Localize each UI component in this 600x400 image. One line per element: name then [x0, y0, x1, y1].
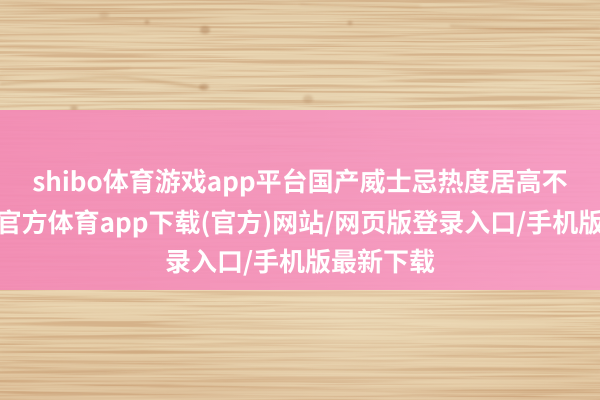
pink banner [0, 110, 600, 290]
title [0, 162, 600, 279]
title: 录入口/手机版最新下载 [165, 242, 435, 279]
title: shibo体育游戏app平台国产威士忌热度居高不 [32, 162, 568, 199]
title: 官方体育app下载(官方)网站/网页版登录入口/手机版 [0, 203, 600, 240]
